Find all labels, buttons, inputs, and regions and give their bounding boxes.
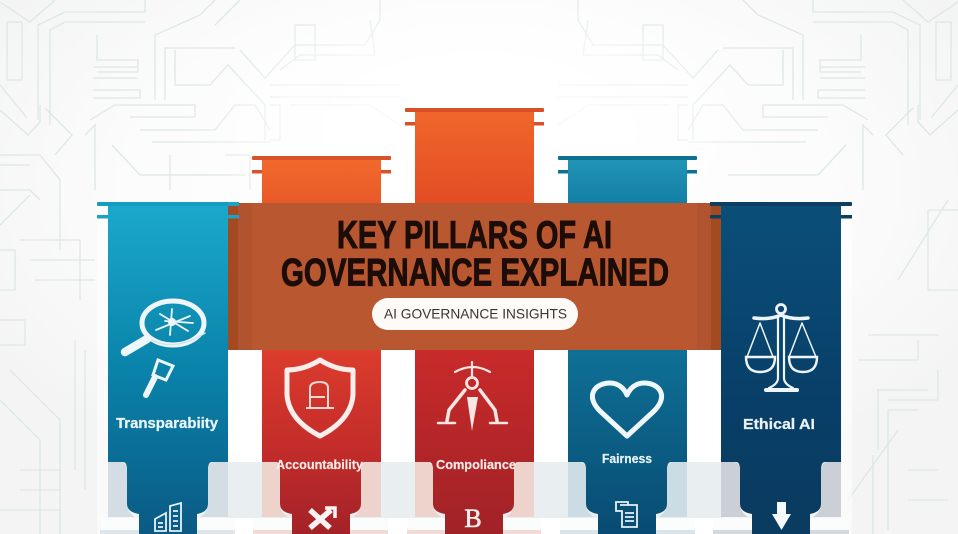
icon: compliance balance xyxy=(438,362,507,431)
icon: magnifier xyxy=(125,301,205,352)
title text: GOVERNANCE EXPLAINED xyxy=(281,252,669,294)
pillar 3: Compliance xyxy=(405,108,544,534)
white columns behind pillars xyxy=(97,200,852,534)
icon: scales of justice xyxy=(746,304,817,390)
icon: letter B: B xyxy=(464,504,482,533)
pillar 5: Ethical AI xyxy=(710,202,852,534)
pillar 2: Accountability xyxy=(252,156,391,534)
subtitle pill xyxy=(372,298,578,330)
icon: document xyxy=(616,502,637,527)
label: Transparabiity: Transparabiity xyxy=(116,416,218,432)
title text xyxy=(281,214,669,294)
title text: KEY PILLARS OF AI xyxy=(337,214,612,257)
pillar 1: Transparency xyxy=(97,202,239,534)
pillar 4: Fairness xyxy=(558,156,697,534)
label: Compoliance: Compoliance xyxy=(436,458,516,472)
centre fade xyxy=(179,0,779,280)
label: Fairness: Fairness xyxy=(602,452,652,466)
icon: down arrow xyxy=(772,502,791,530)
icon: shield xyxy=(287,360,353,436)
label: Ethical AI: Ethical AI xyxy=(743,417,815,433)
subtitle pill: AI GOVERNANCE INSIGHTS xyxy=(384,306,567,322)
title banner xyxy=(228,202,721,350)
icon: brush xyxy=(146,360,173,395)
icon: heart xyxy=(592,383,662,436)
icon: buildings xyxy=(155,503,181,531)
translucent base band xyxy=(228,462,721,518)
label: Accountability: Accountability xyxy=(276,458,363,472)
icon: crossed tools xyxy=(310,508,335,528)
